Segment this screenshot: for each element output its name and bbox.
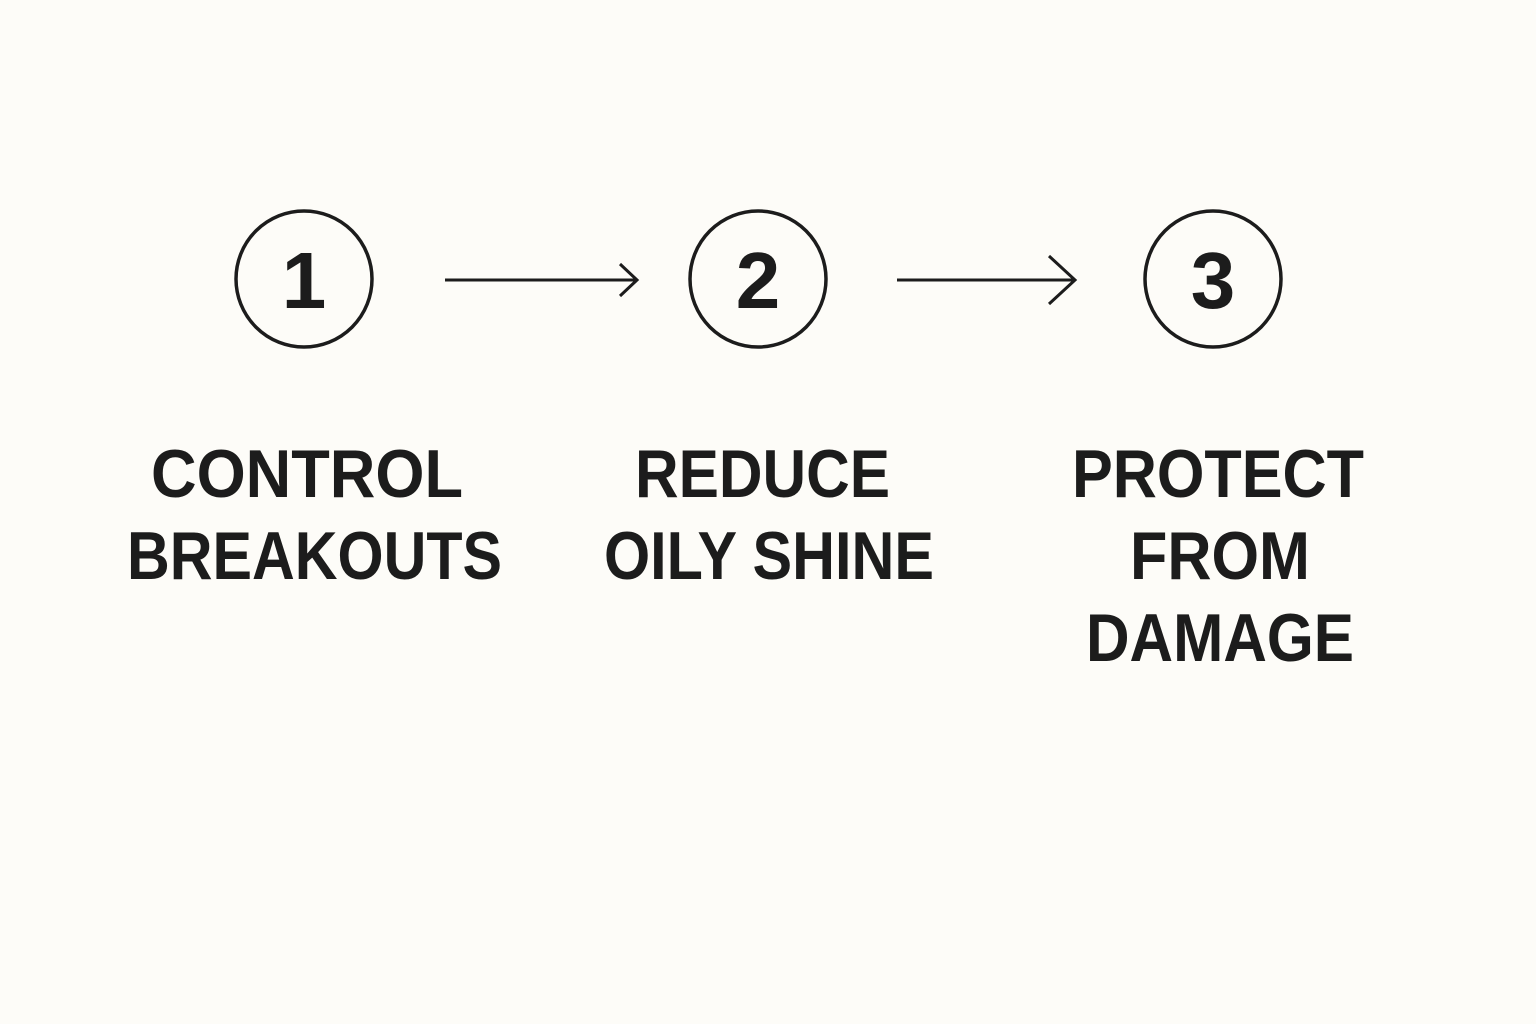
label 3: protect from damage: [1072, 436, 1364, 676]
label 1: control breakouts: [127, 436, 502, 594]
label 2: reduce oily shine: OILY SHINE: [604, 518, 934, 594]
step 2 circle: [690, 211, 826, 347]
step 1 circle: [236, 211, 372, 347]
label 1: control breakouts: CONTROL: [151, 436, 463, 512]
step 1 circle: 1: [282, 236, 326, 325]
label 3: protect from damage: PROTECT: [1072, 436, 1364, 512]
step 3 circle: [1145, 211, 1281, 347]
arrow 2 to 3: [897, 256, 1075, 304]
arrow 1 to 2: [445, 264, 637, 296]
step 2 circle: 2: [736, 236, 780, 325]
label 3: protect from damage: DAMAGE: [1086, 600, 1354, 676]
label 2: reduce oily shine: REDUCE: [635, 436, 890, 512]
label 3: protect from damage: FROM: [1130, 518, 1310, 594]
label 2: reduce oily shine: [604, 436, 934, 594]
label 1: control breakouts: BREAKOUTS: [127, 518, 502, 594]
step 3 circle: 3: [1191, 236, 1235, 325]
